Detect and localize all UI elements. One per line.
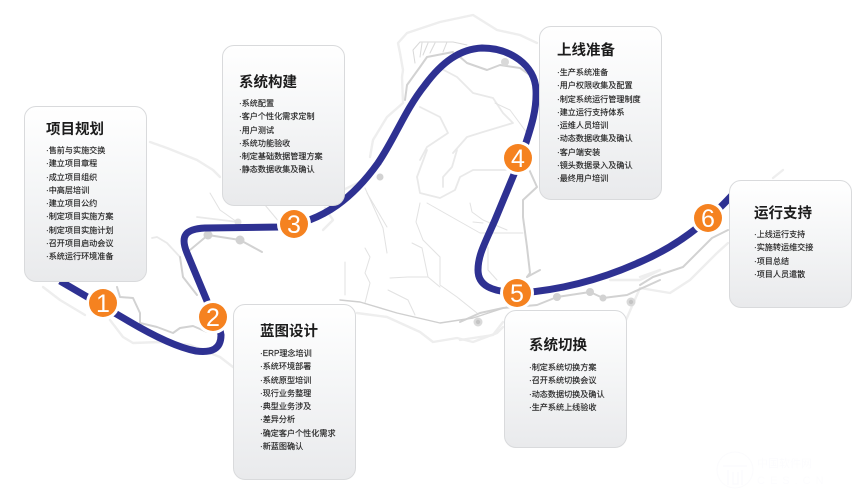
heading: 上线准备: 上线准备 bbox=[557, 43, 615, 59]
inner pale tributaries bbox=[152, 68, 513, 257]
list: 上线准备 tasks: ·用户权限收集及配置 bbox=[557, 81, 633, 90]
step 5 marker: 5 bbox=[510, 280, 524, 308]
list: 系统构建 tasks: ·系统配置 bbox=[239, 99, 274, 108]
list: 上线准备 tasks bbox=[557, 68, 641, 183]
city dots bbox=[204, 58, 636, 326]
list: 蓝图设计 tasks: ·确定客户个性化需求 bbox=[260, 428, 336, 438]
north hatch area bbox=[413, 42, 467, 63]
list: 上线准备 tasks: ·制定系统运行管理制度 bbox=[557, 94, 641, 104]
list: 上线准备 tasks: ·客户端安装 bbox=[557, 148, 600, 156]
list: 上线准备 tasks: ·镜头数据录入及确认 bbox=[557, 161, 633, 170]
step 6 marker: 6 bbox=[701, 205, 715, 233]
main gray river branches bbox=[117, 52, 728, 333]
list: 项目规划 tasks: ·建立项目章程 bbox=[46, 159, 97, 168]
panel: 上线准备 bbox=[539, 26, 662, 200]
panel: 系统切换 bbox=[504, 310, 627, 448]
list: 项目规划 tasks: ·中高层培训 bbox=[46, 186, 89, 195]
list: 蓝图设计 tasks: ·差异分析 bbox=[260, 415, 295, 424]
watermark logo: 中国软件网 bbox=[757, 456, 812, 470]
step 2 marker: 2 bbox=[206, 304, 220, 332]
list: 上线准备 tasks: ·建立运行支持体系 bbox=[557, 108, 624, 117]
list: 蓝图设计 tasks: ·ERP理念培训 bbox=[260, 349, 312, 358]
heading: 系统构建: 系统构建 bbox=[239, 75, 297, 91]
list: 项目规划 tasks bbox=[46, 146, 114, 261]
list: 运行支持 tasks: ·实施转运维交接 bbox=[754, 243, 813, 252]
list: 蓝图设计 tasks: ·系统原型培训 bbox=[260, 376, 311, 384]
list: 上线准备 tasks: ·运维人员培训 bbox=[557, 121, 608, 130]
list: 蓝图设计 tasks: ·现行业务整理 bbox=[260, 389, 311, 398]
list: 系统切换 tasks: ·召开系统切换会议 bbox=[529, 376, 596, 385]
list: 蓝图设计 tasks: ·典型业务涉及 bbox=[260, 402, 311, 411]
heading: 运行支持: 运行支持 bbox=[754, 206, 812, 222]
list: 系统构建 tasks: ·制定基础数据管理方案 bbox=[239, 152, 323, 161]
list: 运行支持 tasks bbox=[754, 230, 814, 279]
panel: 系统构建 bbox=[222, 45, 345, 206]
list: 系统切换 tasks bbox=[529, 362, 605, 412]
list: 项目规划 tasks: ·召开项目启动会议 bbox=[46, 239, 113, 248]
pale boundary lines bbox=[43, 15, 783, 367]
list: 系统切换 tasks: ·动态数据切换及确认 bbox=[529, 390, 605, 398]
panel: 项目规划 bbox=[24, 106, 147, 282]
list: 系统切换 tasks: ·生产系统上线验收 bbox=[529, 403, 596, 412]
step 4 marker: 4 bbox=[511, 145, 525, 173]
panel: 运行支持 bbox=[729, 180, 852, 308]
list: 系统切换 tasks: ·制定系统切换方案 bbox=[529, 363, 596, 372]
list: 项目规划 tasks: ·成立项目组织 bbox=[46, 172, 97, 182]
step 3 marker: 3 bbox=[287, 211, 301, 239]
list: 系统构建 tasks: ·系统功能验收 bbox=[239, 139, 290, 148]
heading: 蓝图设计: 蓝图设计 bbox=[260, 324, 318, 340]
panel: 蓝图设计 bbox=[233, 304, 356, 480]
list: 上线准备 tasks: ·最终用户培训 bbox=[557, 174, 608, 183]
watermark logo: CES.CN bbox=[757, 475, 829, 487]
list: 运行支持 tasks: ·上线运行支持 bbox=[754, 230, 805, 239]
list: 运行支持 tasks: ·项目总结 bbox=[754, 256, 789, 266]
southern gray river bbox=[340, 300, 507, 323]
step 1 marker: 1 bbox=[96, 290, 110, 318]
heading: 系统切换: 系统切换 bbox=[529, 338, 587, 354]
list: 项目规划 tasks: ·建立项目公约 bbox=[46, 199, 97, 208]
list: 系统构建 tasks bbox=[239, 99, 323, 174]
list: 项目规划 tasks: ·制定项目实施方案 bbox=[46, 212, 113, 221]
list: 上线准备 tasks: ·生产系统准备 bbox=[557, 68, 608, 77]
thin gray rivers bbox=[210, 103, 527, 315]
list: 项目规划 tasks: ·制定项目实施计划 bbox=[46, 226, 113, 234]
list: 项目规划 tasks: ·售前与实施交换 bbox=[46, 146, 105, 155]
list: 上线准备 tasks: ·动态数据收集及确认 bbox=[557, 134, 633, 143]
list: 项目规划 tasks: ·系统运行环境准备 bbox=[46, 252, 113, 261]
list: 系统构建 tasks: ·用户测试 bbox=[239, 126, 274, 134]
list: 系统构建 tasks: ·静态数据收集及确认 bbox=[239, 165, 315, 174]
list: 系统构建 tasks: ·客户个性化需求定制 bbox=[239, 112, 315, 121]
list: 蓝图设计 tasks: ·新蓝图确认 bbox=[260, 442, 303, 451]
list: 运行支持 tasks: ·项目人员遣散 bbox=[754, 270, 805, 279]
list: 蓝图设计 tasks bbox=[260, 348, 336, 451]
list: 蓝图设计 tasks: ·系统环境部署 bbox=[260, 362, 311, 371]
heading: 项目规划: 项目规划 bbox=[46, 122, 104, 138]
